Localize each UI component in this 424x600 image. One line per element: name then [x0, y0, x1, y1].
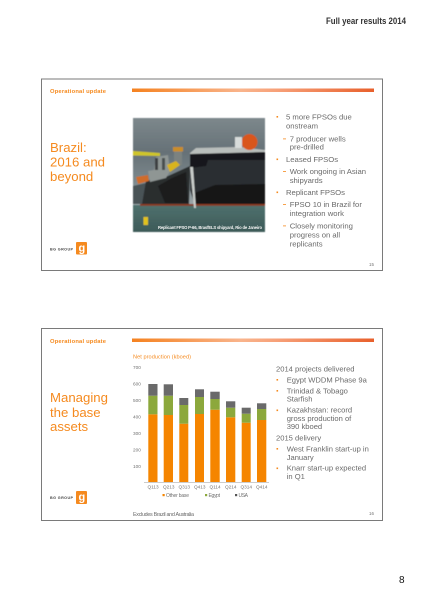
y axis labels: 600 [133, 382, 141, 386]
slide heading: operational update: Operational update [50, 89, 107, 95]
text block: projects delivered and 2015 delivery: West Franklin start-up in [287, 444, 369, 453]
title: Managing the base assets: the base [50, 405, 101, 420]
x axis labels: Q113 [148, 484, 159, 490]
chart title: Net production (kboed) [133, 354, 191, 360]
legend [162, 493, 249, 499]
slide number 15: 15 [369, 262, 374, 267]
text block: projects delivered and 2015 delivery: Knarr start-up expected [287, 464, 366, 473]
bullet list: FPSO updates: Replicant FPSOs [286, 188, 345, 197]
logo: BG Group: BG GROUP [50, 496, 74, 500]
logo: BG Group: BG GROUP [50, 248, 74, 252]
y axis labels: 500 [133, 398, 141, 403]
legend: Other base [166, 493, 189, 499]
footnote: Excludes Brazil and Australia [133, 512, 194, 518]
bullet list: FPSO updates: Leased FPSOs [286, 155, 338, 164]
y axis labels: 300 [133, 431, 141, 436]
bullet list: FPSO updates: FPSO 10 in Brazil for [290, 200, 362, 209]
page number: 8 [399, 575, 405, 586]
legend: USA [238, 493, 249, 499]
x axis labels: Q213 [163, 484, 175, 490]
x axis labels: Q214 [225, 484, 237, 490]
bullet list: FPSO updates: onstream [286, 122, 318, 131]
x axis labels: Q414 [256, 484, 268, 490]
bullet list: FPSO updates: pre-drilled [290, 143, 324, 152]
bullet list: FPSO updates: Closely monitoring [290, 222, 353, 231]
y axis labels [133, 365, 141, 469]
panel: Brazil slide [42, 79, 382, 270]
text block: projects delivered and 2015 delivery: Trinidad & Tobago [287, 387, 348, 396]
slide frame [42, 79, 382, 270]
slide number 16: 16 [369, 511, 374, 516]
bullet list: FPSO updates: progress on all [290, 231, 340, 240]
x axis labels: Q313 [178, 484, 190, 490]
x axis labels: Q314 [240, 484, 252, 490]
photo caption: Replicant FPSO P-66, BrasfELS shipyard, Rio de Janeiro [158, 225, 262, 230]
text block: projects delivered and 2015 delivery: in Q1 [287, 472, 305, 481]
title: Brazil 2016 and beyond: beyond [50, 169, 93, 184]
y axis labels: 700 [133, 365, 141, 370]
logo: BG Group: g [78, 492, 85, 504]
slide frame [42, 328, 382, 520]
x axis line [144, 481, 269, 484]
title: Brazil 2016 and beyond: 2016 and [50, 154, 105, 170]
stacked bars: Egypt [148, 396, 266, 424]
bullet list: FPSO updates: replicants [290, 240, 323, 249]
bullet list: FPSO updates: shipyards [290, 176, 323, 185]
logo: BG Group [50, 242, 87, 254]
logo: BG Group [50, 491, 87, 504]
y axis labels: 400 [133, 414, 141, 420]
bullet list: FPSO updates [276, 113, 366, 249]
x axis labels [148, 484, 268, 490]
title: Managing the base assets: Managing [50, 390, 108, 405]
slide heading: operational update: Operational update [50, 339, 107, 345]
text block: projects delivered and 2015 delivery: 390 kboed [287, 422, 322, 431]
legend: Egypt [208, 493, 221, 499]
bullet list: FPSO updates: Work ongoing in Asian [290, 167, 366, 176]
stacked bars: other base [148, 410, 266, 482]
title: Brazil 2016 and beyond: Brazil: [50, 140, 87, 155]
text block: projects delivered and 2015 delivery: Egypt WDDM Phase 9a [287, 375, 368, 384]
y axis labels: 200 [133, 448, 141, 452]
bullet list: FPSO updates: 5 more FPSOs due [286, 113, 352, 122]
text block: projects delivered and 2015 delivery: 2014 projects delivered [276, 365, 355, 374]
bullet list: FPSO updates: integration work [290, 209, 344, 218]
photo: FPSO vessel at shipyard [133, 118, 265, 232]
text block: projects delivered and 2015 delivery: 2015 delivery [276, 433, 321, 442]
text block: projects delivered and 2015 delivery [276, 365, 369, 481]
text block: projects delivered and 2015 delivery: Kazakhstan: record [287, 406, 352, 415]
logo: BG Group: g [78, 242, 85, 254]
x axis labels: Q413 [194, 484, 206, 490]
x axis labels: Q114 [210, 484, 221, 490]
title: Managing the base assets: assets [50, 419, 89, 434]
y axis labels: 100 [133, 464, 141, 469]
orange header bar [132, 88, 374, 92]
text block: projects delivered and 2015 delivery: Starfish [287, 395, 312, 404]
bullet list: FPSO updates: 7 producer wells [290, 134, 346, 143]
stacked bars: USA [148, 384, 266, 414]
orange header bar [132, 338, 374, 342]
bar chart: net production [133, 354, 269, 499]
panel: managing the base assets slide [42, 328, 382, 520]
page header: Full year results 2014 [326, 16, 407, 26]
text block: projects delivered and 2015 delivery: January [287, 453, 314, 462]
text block: projects delivered and 2015 delivery: gross production of [287, 414, 352, 423]
